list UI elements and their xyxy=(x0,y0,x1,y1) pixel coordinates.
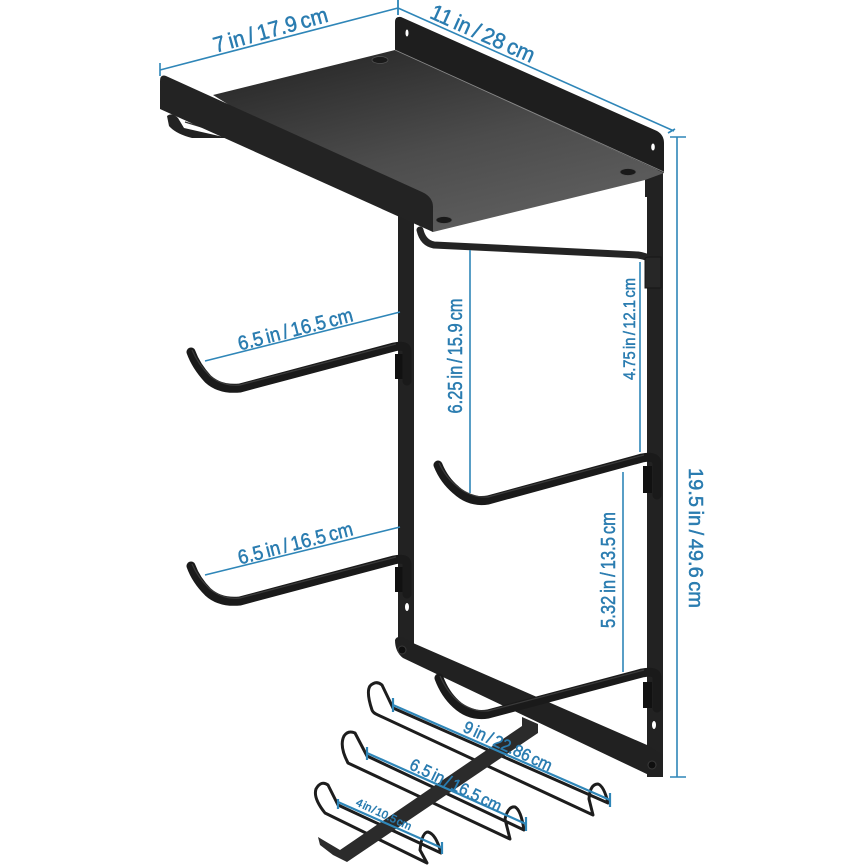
wire holder long xyxy=(368,683,608,815)
shelf xyxy=(160,17,664,232)
dimension: shelf width xyxy=(398,0,675,133)
dimension: lower left hook: 6.5 in / 16.5 cm xyxy=(236,519,355,569)
dimension: medium wire holder: 6.5 in / 16.5 cm xyxy=(407,755,505,816)
dimension: upper left hook: 6.5 in / 16.5 cm xyxy=(236,305,355,355)
flat arm xyxy=(318,717,538,862)
dimension: 6.25 in spacing: 6.25 in / 15.9 cm xyxy=(445,298,467,414)
wire holder medium xyxy=(342,732,524,839)
hook under shelf, rear xyxy=(167,114,661,288)
dimension: short wire holder xyxy=(338,797,442,854)
left hook upper xyxy=(191,344,407,388)
dimension: medium wire holder xyxy=(367,747,526,831)
shelf screws xyxy=(372,56,636,224)
shelf back lip xyxy=(395,17,664,173)
shelf front lip xyxy=(160,76,433,232)
dimension: 5.32 in spacing: 5.32 in / 13.5 cm xyxy=(598,512,620,628)
dimension: total height: 19.5 in / 49.6 cm xyxy=(684,468,706,608)
dimension: total height xyxy=(670,137,706,777)
dimension: shelf depth: 7 in / 17.9 cm xyxy=(210,2,331,58)
dimension: long wire holder xyxy=(393,698,610,807)
dimension: 4.75 in spacing: 4.75 in / 12.1 cm xyxy=(620,278,639,380)
dimension: lower left hook xyxy=(205,519,400,575)
shelf plate xyxy=(213,50,664,232)
dimension: short wire holder: 4 in / 10.5 cm xyxy=(354,797,413,833)
dimension: upper left hook xyxy=(205,305,400,361)
right hook lower xyxy=(439,670,657,715)
left hook lower xyxy=(191,557,407,601)
wire holder short xyxy=(315,783,441,863)
dimension: shelf depth xyxy=(160,0,398,76)
rack frame: posts and diagonal bar xyxy=(395,170,663,777)
dimension: long wire holder: 9 in / 22.86 cm xyxy=(460,718,555,775)
dimension: shelf width: 11 in / 28 cm xyxy=(427,0,539,68)
right hook middle xyxy=(438,455,657,501)
